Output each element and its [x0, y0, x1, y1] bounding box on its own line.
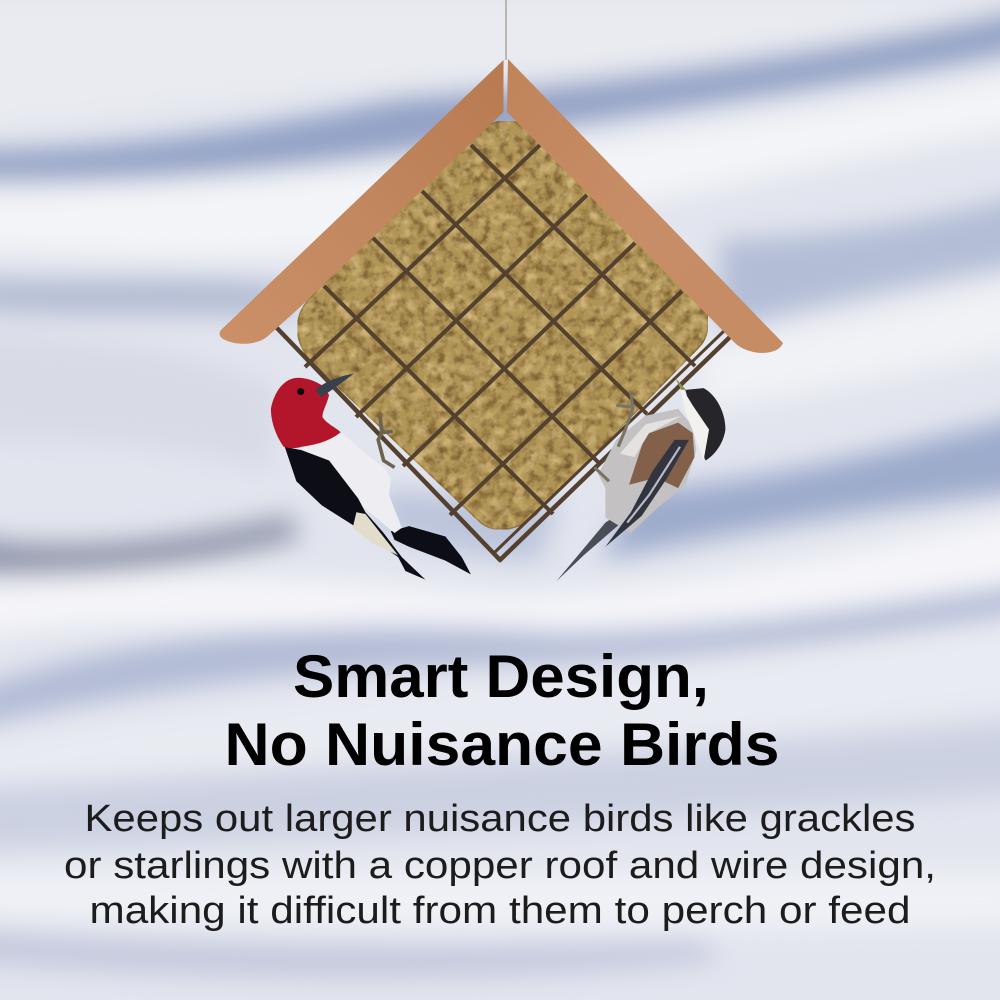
wing — [605, 440, 689, 547]
white cheek — [680, 385, 709, 461]
beak — [315, 374, 354, 397]
body text: Keeps out larger nuisance birds like grackles — [84, 798, 916, 840]
legs — [378, 416, 395, 467]
wire grid — [276, 145, 731, 561]
white chest and belly — [300, 431, 402, 533]
tail — [391, 526, 471, 574]
feeder — [220, 59, 783, 561]
body — [598, 409, 696, 533]
title: No Nuisance Birds — [224, 711, 780, 778]
eye — [297, 388, 304, 395]
bird: chickadee — [556, 378, 725, 581]
title — [224, 643, 780, 778]
copper roof left panel — [220, 60, 504, 344]
legs — [595, 392, 633, 481]
suet cake — [298, 121, 708, 529]
tail — [556, 505, 631, 581]
black wing — [285, 447, 425, 580]
beak — [675, 378, 686, 390]
title: Smart Design, — [293, 643, 709, 710]
hanging wire — [505, 0, 507, 60]
red head — [271, 378, 341, 448]
head — [685, 388, 725, 461]
body text — [64, 798, 936, 932]
body text: or starlings with a copper roof and wire design, — [64, 845, 936, 887]
bird: red-headed woodpecker — [271, 374, 471, 580]
brown flank — [629, 423, 694, 488]
white wing patch — [353, 512, 398, 555]
body text: making it difficult from them to perch or feed — [90, 890, 910, 932]
pale back strip — [620, 416, 682, 457]
wing feather — [627, 447, 680, 523]
copper roof right panel — [507, 59, 783, 353]
